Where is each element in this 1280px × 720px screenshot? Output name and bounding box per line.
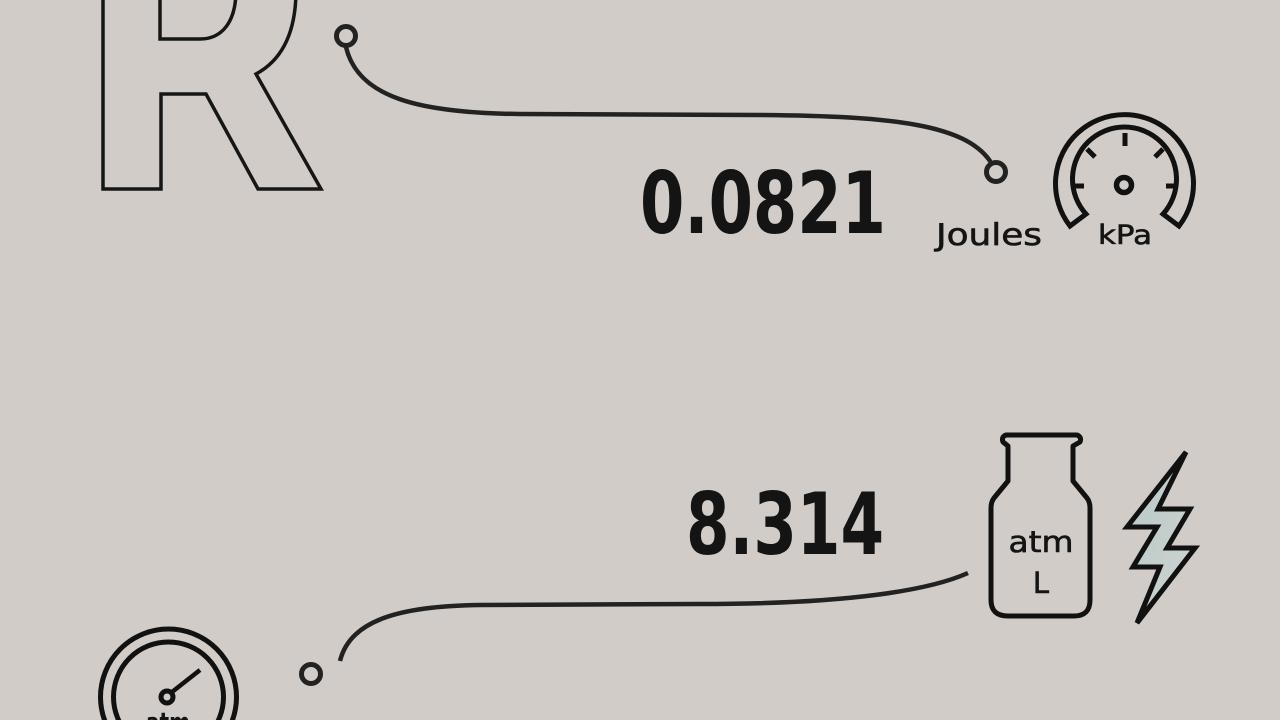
icon: bottle atm L: atm [1008,525,1074,559]
icon: lightning bolt [1127,452,1195,623]
icon: kPa pressure gauge: kPa [1098,220,1152,251]
connector: R to Joules [336,26,1006,182]
outlined letter R [103,0,321,189]
icon: kPa pressure gauge [1056,115,1194,251]
connector: bottle to atm gauge [302,573,968,684]
value 8.314: 8.314 [686,475,884,575]
label Joules: Joules [934,218,1042,253]
icon: bottle atm L [991,435,1090,616]
icon: atm gauge [100,629,236,720]
icon: bottle atm L: L [1033,566,1049,600]
value 0.0821: 0.0821 [640,154,886,254]
